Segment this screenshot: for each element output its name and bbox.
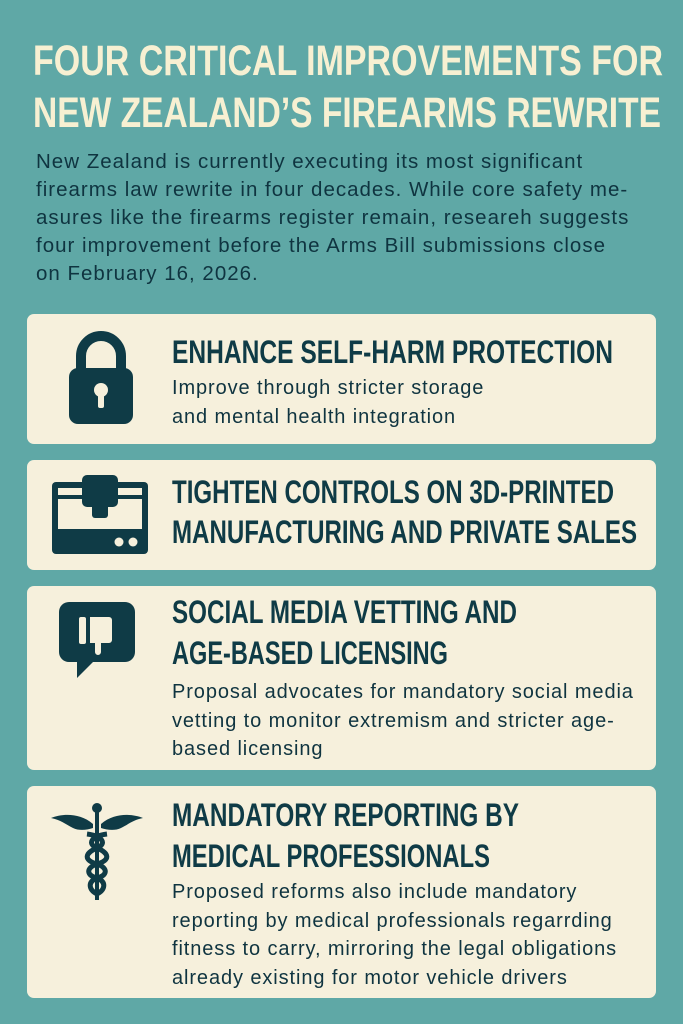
title [33,37,663,137]
intro text: New Zealand is currently executing its most significant [36,150,583,173]
body: social media [172,681,634,760]
heading: medical: MEDICAL PROFESSIONALS [172,838,490,873]
heading: social media [172,594,517,670]
body: medical: reporting by medical professionals regarrding [172,910,613,932]
body: self-harm: Improve through stricter storage [172,377,484,399]
body: social media: Proposal advocates for mandatory social media [172,681,634,703]
icon: caduceus [51,803,143,900]
icon: 3D printer [52,475,148,554]
body: social media: vetting to monitor extremism and stricter age- [172,710,615,732]
heading: social media: SOCIAL MEDIA VETTING AND [172,594,517,630]
body: medical: fitness to carry, mirroring the legal obligations [172,938,617,960]
icon: thumbs-down speech bubble [59,602,135,678]
heading: social media: AGE-BASED LICENSING [172,635,448,670]
body: self-harm: and mental health integration [172,406,456,428]
heading: medical: MANDATORY REPORTING BY [172,797,519,833]
heading: medical [172,797,519,873]
intro text [36,150,629,285]
panel: medical reporting [27,786,656,998]
intro text: four improvement before the Arms Bill submissions close [36,234,606,257]
body: medical [172,881,617,988]
intro text: asures like the firearms register remain, researeh suggests [36,206,629,229]
heading: 3D printing [172,474,637,550]
intro text: on February 16, 2026. [36,262,259,285]
icon: padlock [69,331,133,424]
panel: social media vetting [27,586,656,770]
body: medical: Proposed reforms also include mandatory [172,881,577,903]
body: medical: already existing for motor vehicle drivers [172,966,568,988]
intro text: firearms law rewrite in four decades. While core safety me- [36,178,628,201]
body: social media: based licensing [172,738,323,760]
panel: self-harm protection [27,314,656,444]
panel: 3D printing [27,460,656,570]
body: self-harm [172,377,484,428]
